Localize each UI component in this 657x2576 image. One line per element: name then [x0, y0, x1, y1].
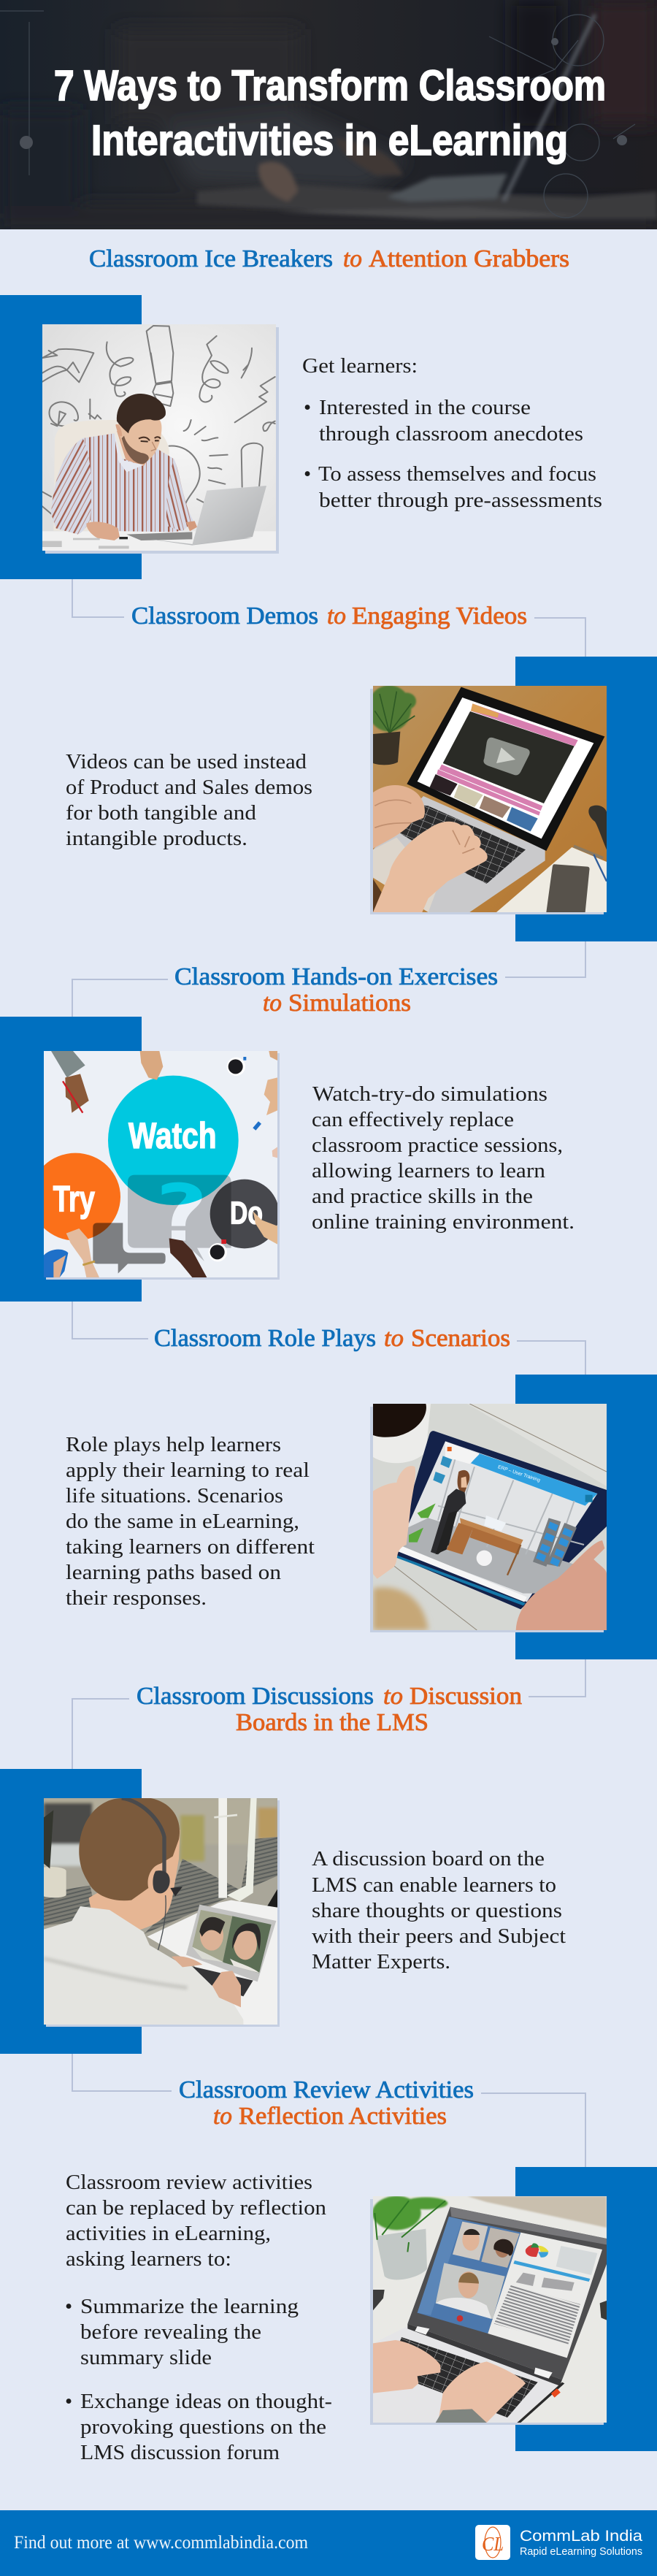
- heading: review activities: to: [213, 2103, 232, 2130]
- text block: review activities: asking learners to:: [66, 2247, 231, 2271]
- text block: simulations: Watch-try-do simulations: [312, 1082, 548, 1106]
- photo: watch try do bubbles: Watch: [128, 1115, 217, 1156]
- heading: hands-on exercises: [174, 963, 498, 1017]
- panel: hands-on exercises: [0, 963, 575, 1302]
- heading: discussions: to: [383, 1683, 403, 1710]
- logo wordmark: Rapid eLearning Solutions: [520, 2545, 642, 2558]
- heading: review activities: Reflection Activities: [239, 2103, 447, 2130]
- heading: role plays: to: [384, 1325, 404, 1352]
- text block: review activities: activities in eLearning,: [66, 2222, 271, 2245]
- heading: demos: to: [327, 603, 346, 630]
- text block: simulations: online training environment.: [312, 1210, 575, 1234]
- photo: laptop with video conference: [373, 2196, 607, 2423]
- blue accent block: [0, 1017, 142, 1302]
- blue accent block: [515, 2167, 657, 2451]
- logo wordmark: [520, 2528, 642, 2558]
- text block: get learners: To assess themselves and focus: [318, 462, 596, 486]
- heading: role plays: Scenarios: [411, 1325, 510, 1352]
- text block: videos: [66, 750, 312, 850]
- text block: simulations: allowing learners to learn: [312, 1159, 546, 1182]
- title: Interactivities in eLearning: [91, 117, 568, 164]
- photo: watch try do bubbles: [44, 1051, 277, 1277]
- text block: discussion board: LMS can enable learners to: [312, 1873, 556, 1897]
- text block: review activities: Exchange ideas on thought-: [80, 2390, 332, 2413]
- text block: role plays: Role plays help learners: [66, 1433, 281, 1456]
- logo icon: CL: [482, 2533, 504, 2555]
- heading: ice breakers: Classroom Ice Breakers: [89, 245, 333, 272]
- connector 3 left: [72, 1302, 148, 1339]
- heading: discussions: Discussion: [410, 1683, 522, 1710]
- text block: review activities: summary slide: [80, 2346, 212, 2369]
- text block: role plays: do the same in eLearning,: [66, 1510, 299, 1533]
- connector 4 left: [72, 1699, 129, 1769]
- header band: [0, 0, 657, 229]
- heading: demos: [131, 603, 527, 630]
- heading: hands-on exercises: Classroom Hands-on Exercises: [174, 963, 498, 990]
- connector 3 right: [517, 1341, 585, 1375]
- panel: role plays: [66, 1325, 657, 1659]
- connector 1 left: [72, 579, 124, 617]
- heading: review activities: [179, 2076, 474, 2130]
- text block: get learners: Get learners:: [302, 354, 418, 378]
- text block: review activities: LMS discussion forum: [80, 2441, 280, 2464]
- text block: get learners: Interested in the course: [319, 396, 531, 419]
- photo: hands holding tablet with scenario: ERP – User Training: [497, 1464, 541, 1483]
- blue accent block: [0, 295, 142, 579]
- text block: review activities: can be replaced by reflection: [66, 2196, 327, 2220]
- text block: review activities: •: [65, 2295, 72, 2318]
- connector 2 right: [505, 941, 585, 977]
- text block: videos: for both tangible and: [66, 801, 257, 825]
- heading: demos: Classroom Demos: [131, 603, 318, 630]
- text block: role plays: [66, 1433, 315, 1610]
- logo icon: [475, 2525, 510, 2560]
- panel: ice breakers: [0, 245, 602, 579]
- panel: demos: [66, 603, 657, 941]
- footer: [0, 2510, 657, 2576]
- text block: role plays: apply their learning to real: [66, 1459, 310, 1482]
- photo: watch try do bubbles: Try: [53, 1179, 95, 1220]
- text block: discussion board: A discussion board on the: [312, 1847, 545, 1870]
- text block: discussion board: Matter Experts.: [312, 1950, 450, 1973]
- text block: role plays: their responses.: [66, 1586, 207, 1610]
- photo: hands typing on laptop with video: [373, 686, 607, 912]
- text block: role plays: taking learners on different: [66, 1535, 315, 1559]
- header background photo: [0, 0, 657, 229]
- text block: review activities: before revealing the: [80, 2320, 261, 2344]
- text block: get learners: •: [304, 396, 311, 419]
- text block: videos: intangible products.: [66, 827, 247, 850]
- photo: man on video call with headset: [44, 1798, 277, 2025]
- text block: role plays: life situations. Scenarios: [66, 1484, 283, 1507]
- text block: simulations: classroom practice sessions,: [312, 1134, 563, 1157]
- connector 5 left: [72, 2054, 172, 2091]
- text block: discussion board: share thoughts or questions: [312, 1899, 562, 1922]
- text block: simulations: and practice skills in the: [312, 1185, 533, 1208]
- connector 2 left: [72, 979, 168, 1017]
- text block: review activities: •: [65, 2390, 72, 2413]
- heading: role plays: [154, 1325, 510, 1352]
- heading: discussions: [137, 1683, 522, 1736]
- heading: ice breakers: to: [343, 245, 362, 272]
- heading: demos: Engaging Videos: [352, 603, 527, 630]
- heading: discussions: Classroom Discussions: [137, 1683, 374, 1710]
- panel: discussions: [0, 1683, 566, 2054]
- photo: man at laptop with doodles: [42, 324, 276, 551]
- text block: simulations: can effectively replace: [312, 1108, 514, 1131]
- footer link text: Find out more at www.commlabindia.com: [14, 2533, 309, 2553]
- connector 4 right: [529, 1659, 585, 1697]
- panel: review activities: [65, 2076, 657, 2464]
- text block: get learners: through classroom anecdotes: [319, 422, 583, 446]
- blue accent block: [515, 1375, 657, 1659]
- heading: hands-on exercises: Simulations: [288, 990, 411, 1017]
- heading: ice breakers: Attention Grabbers: [369, 245, 569, 272]
- text block: get learners: [302, 354, 602, 512]
- heading: hands-on exercises: to: [263, 990, 282, 1017]
- heading: role plays: Classroom Role Plays: [154, 1325, 376, 1352]
- text block: review activities: provoking questions on the: [80, 2415, 326, 2439]
- text block: videos: of Product and Sales demos: [66, 776, 312, 799]
- blue accent block: [0, 1769, 142, 2054]
- logo wordmark: CommLab India: [520, 2528, 642, 2545]
- text block: role plays: learning paths based on: [66, 1561, 282, 1584]
- photo: hands holding tablet with scenario: [373, 1404, 607, 1630]
- photo: watch try do bubbles: Do: [230, 1196, 263, 1231]
- heading: discussions: Boards in the LMS: [236, 1709, 429, 1736]
- text block: review activities: Summarize the learning: [80, 2295, 299, 2318]
- text block: simulations: [312, 1082, 575, 1234]
- text block: review activities: [65, 2171, 332, 2464]
- text block: review activities: Classroom review activities: [66, 2171, 312, 2194]
- connector 1 right: [534, 618, 585, 657]
- text block: get learners: •: [304, 462, 311, 486]
- heading: ice breakers: [89, 245, 569, 272]
- connector 5 right: [481, 2093, 585, 2167]
- text block: discussion board: [312, 1847, 566, 1973]
- text block: videos: Videos can be used instead: [66, 750, 307, 773]
- text block: get learners: better through pre-assessments: [319, 489, 602, 512]
- blue accent block: [515, 657, 657, 941]
- heading: review activities: Classroom Review Activities: [179, 2076, 474, 2103]
- title: [54, 62, 606, 164]
- text block: discussion board: with their peers and Subject: [312, 1925, 566, 1948]
